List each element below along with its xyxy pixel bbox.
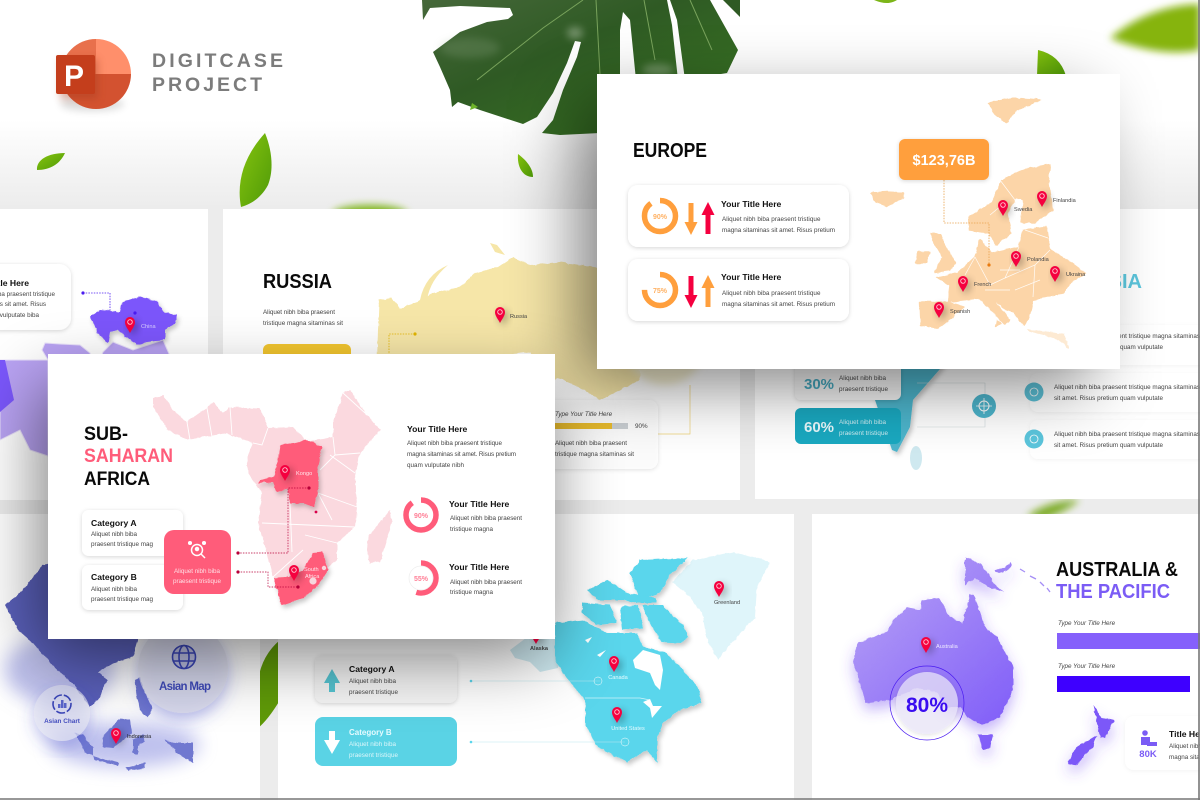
label spanish: Spanish: [950, 309, 970, 315]
connector dots: [81, 291, 137, 315]
congo highlighted: [258, 440, 322, 507]
blurred leaf behind Russia slide: [333, 205, 407, 223]
heading: [84, 423, 173, 490]
stat card 60: [795, 408, 901, 444]
hudson bay: [633, 650, 663, 690]
card 75: [628, 259, 849, 321]
target icon: [972, 394, 996, 418]
label swedia: Swedia: [1014, 207, 1033, 213]
pin united states: [612, 707, 625, 726]
label south africa: Africa: [305, 574, 320, 580]
category a card: Aliquet nibh biba: [349, 678, 396, 685]
row 2: Aliquet nibh biba praesent tristique magna sitaminas: [1054, 384, 1200, 391]
donut 55: 55%: [414, 576, 429, 583]
label polandia: Polandia: [1027, 257, 1050, 263]
slide: asian map: [0, 514, 260, 800]
label china: China: [141, 324, 157, 330]
heading: RUSSIA: [263, 271, 332, 293]
data circle: [625, 305, 705, 385]
category b: praesent tristique mag: [91, 596, 153, 603]
leader nodes: [470, 677, 629, 746]
connector dots: [236, 486, 317, 589]
category a: Aliquet nibh biba: [91, 531, 137, 538]
slide: russia: [223, 209, 740, 500]
connectors: [238, 488, 309, 587]
label australia: Australia: [936, 644, 959, 650]
madagascar: [367, 510, 392, 563]
category b card: Category B: [349, 728, 392, 737]
heading: SUB-: [84, 423, 128, 445]
leaf top right blurred: [1110, 4, 1200, 52]
category b card: praesent tristique: [349, 752, 398, 759]
leaf near europe: [1037, 50, 1066, 76]
category a card: praesent tristique: [349, 689, 398, 696]
right text block: [407, 424, 516, 469]
arrow down red: [684, 276, 698, 308]
row 1: [1030, 325, 1200, 365]
slide: north america: [278, 514, 794, 800]
icon: search people: [189, 542, 205, 558]
australia map: [853, 557, 1114, 765]
pin spanish: [934, 302, 947, 321]
stat text 90: [449, 499, 522, 533]
stat card 60: praesent tristique: [839, 430, 888, 437]
label south africa: [304, 567, 320, 580]
pin ukraina: [1050, 266, 1063, 285]
donut 90: [406, 500, 436, 530]
big circle: Asian Map: [159, 681, 211, 693]
russia map: [377, 257, 640, 400]
dark purple country at left: [0, 360, 14, 412]
slide: south asia: [755, 209, 1200, 499]
row 1: sit amet. Risus pretium quam vulputate: [1054, 344, 1163, 351]
globe icon: [172, 646, 196, 668]
pin canada: [609, 656, 622, 675]
pin french: [958, 276, 971, 295]
category b: Aliquet nibh biba: [91, 586, 137, 593]
panel: sub-saharan africa: [48, 354, 555, 639]
greenland: [672, 552, 770, 660]
label united states: United States: [611, 726, 645, 732]
heading: SAHARAN: [84, 445, 173, 467]
stat text 55: tristique magna: [450, 589, 493, 596]
donut 75: [644, 274, 676, 306]
right text block: Your Title Here: [407, 424, 468, 434]
slide: central asia: [0, 209, 208, 500]
leader lines: [471, 681, 625, 742]
panel: europe: [597, 74, 1120, 369]
bar 1: Type Your Title Here: [1058, 620, 1116, 627]
label alaska: Alaska: [530, 646, 549, 652]
us canada border: [585, 698, 650, 700]
connector dot: [987, 263, 991, 267]
intro text: [263, 309, 343, 327]
pink box: praesent tristique: [173, 578, 221, 585]
bar 2: [1057, 663, 1190, 692]
pin australia: [921, 637, 934, 656]
row 3: sit amet. Risus pretium quam vulputate: [1054, 442, 1163, 449]
logo: powerpoint: [56, 39, 131, 111]
card 90: [628, 185, 849, 247]
right text block: Aliquet nibh biba praesent tristique: [407, 440, 502, 447]
logo: powerpoint: P: [64, 60, 84, 93]
value box: $123,76B: [913, 153, 975, 169]
label canada: Canada: [608, 675, 629, 681]
stat card: 80K: [1139, 749, 1157, 760]
blue glow: [5, 635, 200, 767]
heading: SOUTH ASIA: [1019, 271, 1142, 293]
bar 2: Type Your Title Here: [1058, 663, 1116, 670]
intro text: tristique magna sitaminas sit: [263, 320, 343, 327]
pin greenland: [714, 581, 727, 600]
card 75: Aliquet nibh biba praesent tristique: [722, 290, 821, 297]
africa map: [153, 390, 380, 603]
country borders: [187, 393, 365, 577]
category a card: [315, 655, 457, 703]
row 2: sit amet. Risus pretium quam vulputate: [1054, 395, 1163, 402]
row 3: [1024, 420, 1200, 459]
slide: australia: [812, 514, 1200, 800]
label greenland: Greenland: [714, 600, 740, 606]
label russia: Russia: [510, 314, 528, 320]
monstera leaf: [422, 0, 740, 135]
stat card 30: 30%: [804, 376, 834, 393]
80 percent glass badge: 80%: [906, 694, 948, 717]
heading: THE PACIFIC: [1056, 581, 1170, 603]
small circle: Asian Chart: [44, 718, 81, 725]
stat card 30: Aliquet nibh biba: [839, 375, 886, 382]
stat text 55: Aliquet nibh biba praesent: [450, 579, 522, 586]
pin finlandia: [1037, 191, 1050, 210]
india map: [875, 340, 960, 452]
progress card: Type Your Title Here: [555, 411, 613, 418]
arrow up red: [702, 202, 714, 234]
stat card 60: Aliquet nibh biba: [839, 419, 886, 426]
label finlandia: Finlandia: [1053, 198, 1077, 204]
label french: French: [974, 282, 991, 288]
category a: Category A: [91, 518, 137, 528]
stat text 90: Aliquet nibh biba praesent: [450, 515, 522, 522]
stat card: [1125, 716, 1200, 770]
label south africa: South: [304, 567, 319, 573]
leaf top tiny: [874, 0, 897, 3]
info card: [0, 264, 71, 330]
stat text 90: Your Title Here: [449, 499, 510, 509]
card 75: Your Title Here: [721, 272, 782, 282]
arrow down orange: [684, 203, 698, 235]
pink box: [164, 530, 231, 594]
category a card: Category A: [349, 664, 395, 674]
row 2: [1024, 373, 1200, 412]
category b card: Aliquet nibh biba: [349, 741, 396, 748]
europe map: [871, 98, 1085, 348]
category b: [82, 565, 183, 610]
pin south africa: [289, 565, 302, 584]
pink box: Aliquet nibh biba: [174, 568, 220, 575]
value box connector: [944, 180, 989, 265]
right text block: magna sitaminas sit amet. Risus pretium: [407, 451, 516, 458]
leader line: [658, 385, 690, 434]
asia map: [5, 560, 193, 771]
yellow button: [263, 344, 351, 384]
stat text 55: Your Title Here: [449, 562, 510, 572]
bar 1: [1057, 620, 1200, 649]
stat card 60: 60%: [804, 419, 834, 436]
leaf middle: [240, 133, 272, 207]
pin russia: [495, 307, 508, 326]
pale purple countries: [0, 340, 170, 456]
brand name: [152, 50, 283, 96]
heading: EUROPE: [633, 140, 707, 162]
stat text 55: [449, 562, 522, 596]
stat text 90: tristique magna: [450, 526, 493, 533]
pin kongo: [280, 465, 293, 484]
icon: people: [1141, 730, 1157, 746]
great lakes: [585, 637, 662, 718]
label ukraina: Ukraina: [1066, 272, 1086, 278]
leaf small right: [518, 154, 533, 177]
alaska: [510, 635, 558, 672]
pin swedia: [998, 200, 1011, 219]
category a: praesent tristique mag: [91, 541, 153, 548]
donut 90: 90%: [414, 513, 429, 520]
category a: [82, 510, 183, 556]
card 90: Aliquet nibh biba praesent tristique: [722, 216, 821, 223]
connector: [389, 334, 415, 354]
connector: [83, 293, 110, 320]
row 3: Aliquet nibh biba praesent tristique magna sitaminas: [1054, 431, 1200, 438]
lesotho eswatini: [309, 566, 326, 585]
donut 75: 75%: [653, 288, 668, 295]
progress card: [500, 400, 658, 469]
africa panel shadow: [40, 385, 550, 657]
donut 55: [406, 563, 436, 593]
card 90: Your Title Here: [721, 199, 782, 209]
value box: [899, 139, 989, 180]
category b: Category B: [91, 572, 137, 582]
blurred leaf between lower slides: [258, 640, 280, 728]
sri lanka: [910, 446, 922, 470]
pin china: [125, 317, 138, 336]
pin alaska: [531, 628, 544, 647]
card 75: magna sitaminas sit amet. Risus pretium: [722, 301, 835, 308]
diagram lines: [917, 383, 985, 427]
small circle: [34, 685, 90, 741]
brand name: DIGITCASE: [152, 50, 283, 72]
donut 90: 90%: [653, 214, 668, 221]
country borders: [965, 180, 1050, 297]
arctic islands: [420, 243, 600, 300]
big circle: [138, 623, 228, 713]
heading: [1056, 559, 1178, 603]
row 1: Aliquet nibh biba praesent tristique magna sitaminas: [1054, 333, 1200, 340]
pacific islands: [1020, 569, 1050, 592]
label kongo: Kongo: [296, 471, 312, 477]
canada and us map: [555, 558, 702, 763]
stat card 30: [795, 340, 901, 400]
chart icon: [53, 695, 71, 713]
pin polandia: [1011, 251, 1024, 270]
heading: AFRICA: [84, 468, 150, 490]
leaf small left: [37, 153, 65, 170]
card 90: magna sitaminas sit amet. Risus pretium: [722, 227, 835, 234]
south africa highlighted: [273, 552, 328, 605]
progress card: Aliquet nibh biba praesent: [555, 440, 627, 447]
intro text: Aliquet nibh biba praesent: [263, 309, 335, 316]
arrow up orange: [702, 275, 714, 307]
leaf behind lower right slides: [1027, 500, 1080, 520]
right text block: quam vulputate nibh: [407, 462, 464, 469]
category b card: [315, 717, 457, 766]
progress card: tristique magna sitaminas sit: [555, 451, 634, 458]
pin indonesia: [111, 728, 124, 747]
china map: [90, 296, 177, 345]
label indonesia: Indonesia: [127, 734, 152, 740]
brand name: PROJECT: [152, 74, 262, 96]
heading: AUSTRALIA &: [1056, 559, 1178, 581]
80 percent glass badge: [890, 666, 964, 740]
europe panel shadow: [578, 100, 1090, 385]
progress card: 90%: [635, 423, 648, 430]
donut 90: [644, 200, 676, 232]
stat card 30: praesent tristique: [839, 386, 888, 393]
connector dot: [413, 332, 417, 336]
